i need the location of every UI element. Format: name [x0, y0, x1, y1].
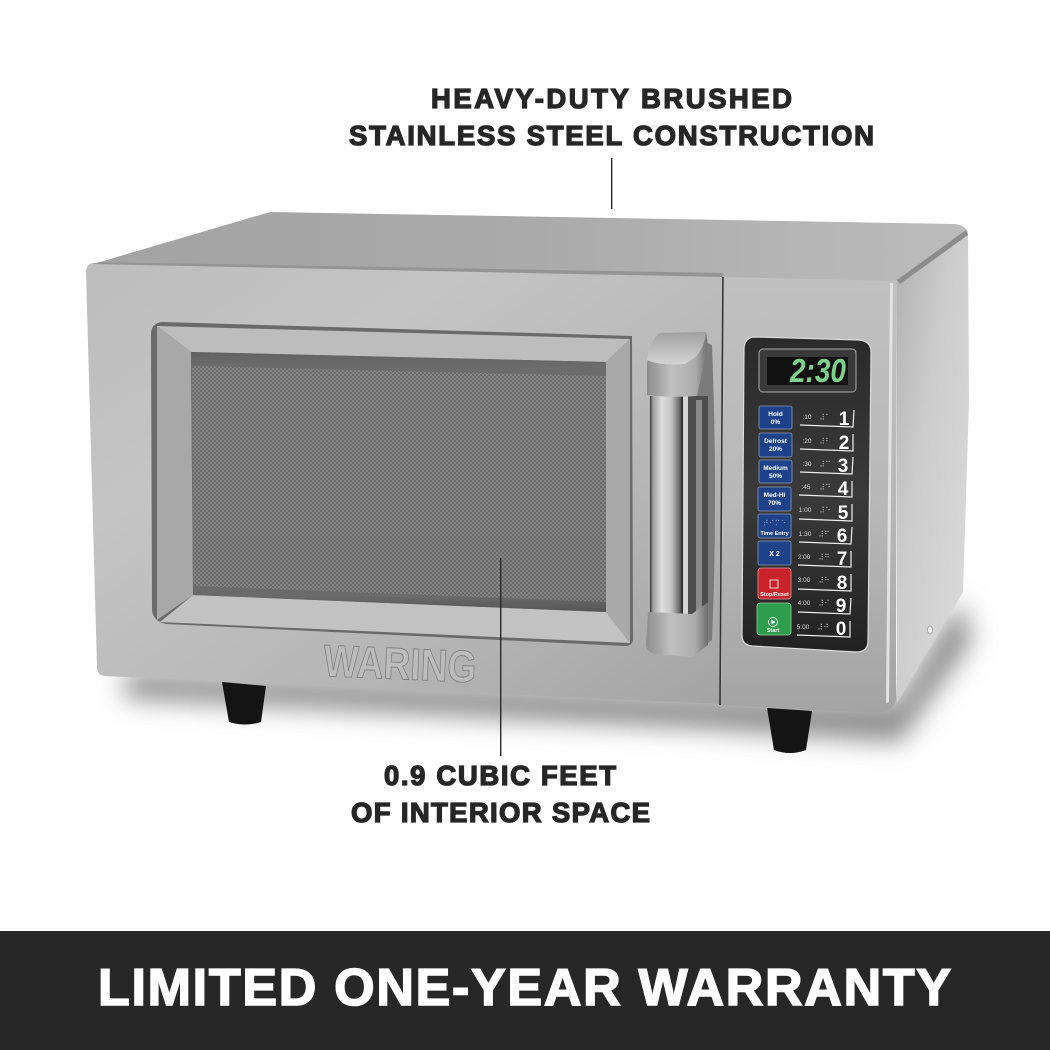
- button: X 2: X 2: [769, 551, 780, 558]
- handle back shadow: [684, 340, 715, 656]
- handle bar: [650, 396, 683, 615]
- window glass: [191, 352, 606, 612]
- button: Time Entry: ⠞⠊⠍⠑: [763, 519, 786, 528]
- perforated mesh: [192, 366, 606, 602]
- key rows: 1:00: [799, 507, 812, 514]
- keypad housing: [742, 337, 871, 652]
- banner: warranty: LIMITED ONE-YEAR WARRANTY: [98, 959, 951, 1017]
- handle highlight strip: [683, 396, 688, 614]
- button: Defrost: [759, 433, 792, 457]
- bezel bottom: [160, 595, 630, 643]
- key rows: 1: [839, 409, 850, 430]
- key rows: 5: [838, 503, 849, 524]
- key rows: ⠼⠁: [819, 413, 831, 422]
- key rows: ⠼⠓: [818, 576, 830, 585]
- button: Med-Hi: Med-Hi: [764, 492, 786, 499]
- key rows: 8: [837, 573, 847, 594]
- button: Time Entry: [758, 514, 791, 538]
- microwave: [86, 212, 969, 753]
- button: Stop/Reset: Stop/Reset: [760, 592, 789, 598]
- front top trim: [92, 262, 723, 277]
- heading: stainless steel construction: [349, 83, 874, 151]
- key rows: 9: [836, 596, 846, 617]
- top cap: [647, 332, 708, 397]
- key rows: ⠼⠋: [818, 530, 830, 539]
- key rows: 4:00: [798, 600, 811, 607]
- button: Defrost: 20%: [769, 446, 782, 453]
- foot: right: [767, 708, 812, 753]
- heading: interior space: OF INTERIOR SPACE: [351, 797, 650, 828]
- control keypad: [742, 337, 871, 652]
- key rows: 6: [837, 526, 847, 547]
- front face: door: [86, 263, 723, 704]
- heading: interior space: 0.9 CUBIC FEET: [384, 760, 616, 791]
- button: Hold: Hold: [768, 411, 783, 418]
- button: Defrost: Defrost: [764, 438, 788, 445]
- key rows: :45: [801, 484, 811, 491]
- button: Stop/Reset: [758, 568, 791, 599]
- side panel: [897, 232, 969, 703]
- top panel: [100, 212, 968, 282]
- button: Start: [757, 603, 791, 635]
- bottom cap: [646, 602, 708, 657]
- callout line: interior: [500, 558, 501, 756]
- chrome corner edge: [897, 230, 968, 284]
- key rows: ⠼⠉: [819, 460, 831, 469]
- key rows: :20: [802, 438, 812, 445]
- bezel top: [157, 326, 630, 362]
- button: Time Entry: Time Entry: [760, 531, 790, 537]
- key rows: [797, 409, 854, 640]
- key rows: 3: [838, 456, 848, 477]
- key rows: ⠼⠛: [818, 553, 830, 562]
- side screw: [928, 626, 932, 634]
- key rows: 4: [838, 479, 849, 500]
- key rows: 0: [836, 619, 846, 640]
- key rows: 2: [839, 433, 849, 454]
- button: X 2: [758, 541, 791, 565]
- key rows: 7: [837, 549, 847, 570]
- bezel left: [157, 326, 193, 620]
- button: Medium: Medium: [763, 465, 788, 472]
- floor shadow: [125, 600, 972, 742]
- key rows: 2:00: [798, 554, 811, 561]
- button: Medium: [759, 460, 792, 483]
- key rows: ⠼⠊: [818, 599, 830, 608]
- heading: interior space: [351, 760, 650, 828]
- handle: [646, 332, 715, 657]
- door seam: [720, 277, 723, 705]
- chrome strip: right edge: [886, 283, 893, 703]
- button: Med-Hi: 70%: [768, 500, 781, 507]
- key rows: ⠼⠚: [817, 623, 829, 632]
- key rows: :10: [802, 414, 812, 421]
- display time: 2:30: [789, 352, 847, 389]
- key rows: ⠼⠙: [819, 483, 831, 492]
- button: Start: Start: [767, 628, 779, 634]
- button: Hold: [759, 406, 792, 429]
- bezel right: [606, 339, 630, 643]
- button: Hold: 0%: [771, 419, 780, 426]
- display bezel: [759, 349, 856, 392]
- heading: stainless steel construction: HEAVY-DUTY BRUSHED: [431, 83, 792, 114]
- key rows: 3:00: [798, 577, 811, 584]
- logo: WARING: WARING: [323, 635, 478, 692]
- display screen: [767, 357, 848, 385]
- callout line: top: [611, 158, 612, 209]
- window frame: [151, 322, 633, 646]
- handle dark strip: [684, 396, 708, 614]
- button: Medium: 50%: [769, 473, 782, 480]
- foot: left: [222, 682, 266, 724]
- key rows: :30: [802, 461, 812, 468]
- heading: stainless steel construction: STAINLESS STEEL CONSTRUCTION: [349, 120, 874, 151]
- key rows: 5:00: [797, 624, 810, 631]
- key rows: 1:30: [799, 531, 812, 538]
- key rows: ⠼⠑: [819, 506, 831, 515]
- banner: warranty: [0, 931, 1050, 1050]
- front face: control panel: [721, 277, 897, 713]
- key rows: ⠼⠃: [819, 437, 831, 446]
- button: Med-Hi: [758, 487, 791, 511]
